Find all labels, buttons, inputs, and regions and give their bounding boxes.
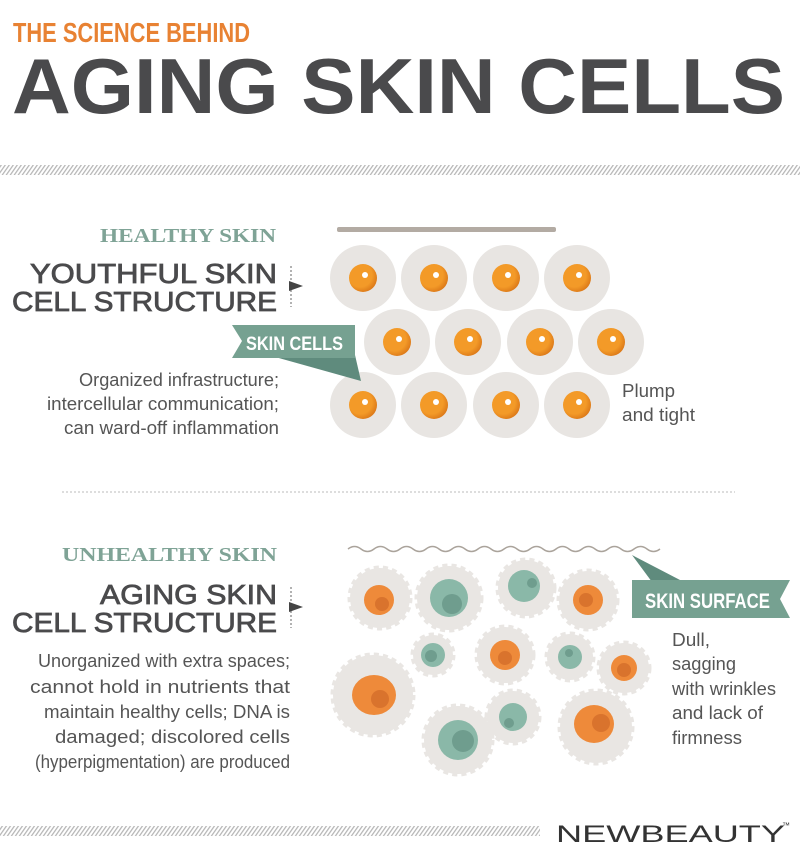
heading: youthful skin cell structure: CELL STRUCTURE (12, 286, 277, 317)
heading: unhealthy skin: UNHEALTHY SKIN (62, 544, 278, 566)
text: unhealthy description: maintain healthy cells; DNA is (44, 702, 290, 722)
heading: youthful skin cell structure (12, 258, 277, 317)
text: plump and tight: Plump (622, 381, 675, 401)
panel: healthy skin (12, 225, 695, 438)
text: unhealthy description (30, 651, 290, 772)
text: ™ (782, 821, 790, 830)
arrow (289, 587, 303, 628)
text: healthy description: Organized infrastructure; (79, 370, 279, 390)
text: dull sagging: with wrinkles (671, 679, 776, 699)
text: unhealthy description: damaged; discolored cells (55, 727, 290, 747)
title: the science behind: THE SCIENCE BEHIND (13, 17, 250, 48)
text: dull sagging: Dull, (672, 630, 710, 650)
callout: skin cells ribbon (232, 325, 361, 381)
text: healthy description (47, 370, 279, 438)
text: dull sagging (671, 630, 776, 748)
text: healthy description: intercellular communication; (47, 394, 279, 414)
callout: skin cells ribbon: SKIN CELLS (246, 334, 343, 355)
panel: unhealthy skin (12, 544, 790, 774)
callout: skin surface ribbon: SKIN SURFACE (645, 590, 770, 613)
callout: skin surface ribbon (632, 555, 790, 618)
heading: aging skin cell structure (12, 579, 277, 638)
title: aging skin cells: AGING SKIN CELLS (12, 42, 785, 130)
text: dull sagging: firmness (672, 728, 742, 748)
text: unhealthy description: Unorganized with extra spaces; (38, 651, 290, 671)
text: dull sagging: and lack of (672, 703, 764, 723)
text: unhealthy description: (hyperpigmentation) are produced (35, 752, 290, 772)
text: plump and tight: and tight (622, 405, 695, 425)
arrow (289, 266, 303, 307)
healthy cells (330, 245, 644, 438)
heading: youthful skin cell structure: YOUTHFUL SKIN (30, 258, 277, 289)
wavy skin surface (348, 546, 660, 552)
heading: aging skin cell structure: CELL STRUCTURE (12, 607, 277, 638)
skin surface bar (337, 227, 556, 232)
heading: aging skin cell structure: AGING SKIN (100, 579, 277, 610)
aging cells (333, 560, 649, 774)
text: unhealthy description: cannot hold in nutrients that (30, 677, 290, 697)
text: dull sagging: sagging (672, 654, 736, 674)
text: plump and tight (622, 381, 695, 425)
heading: healthy skin: HEALTHY SKIN (100, 225, 277, 247)
logo: newbeauty: NEWBEAUTY (556, 821, 785, 848)
text: healthy description: can ward-off inflammation (64, 418, 279, 438)
